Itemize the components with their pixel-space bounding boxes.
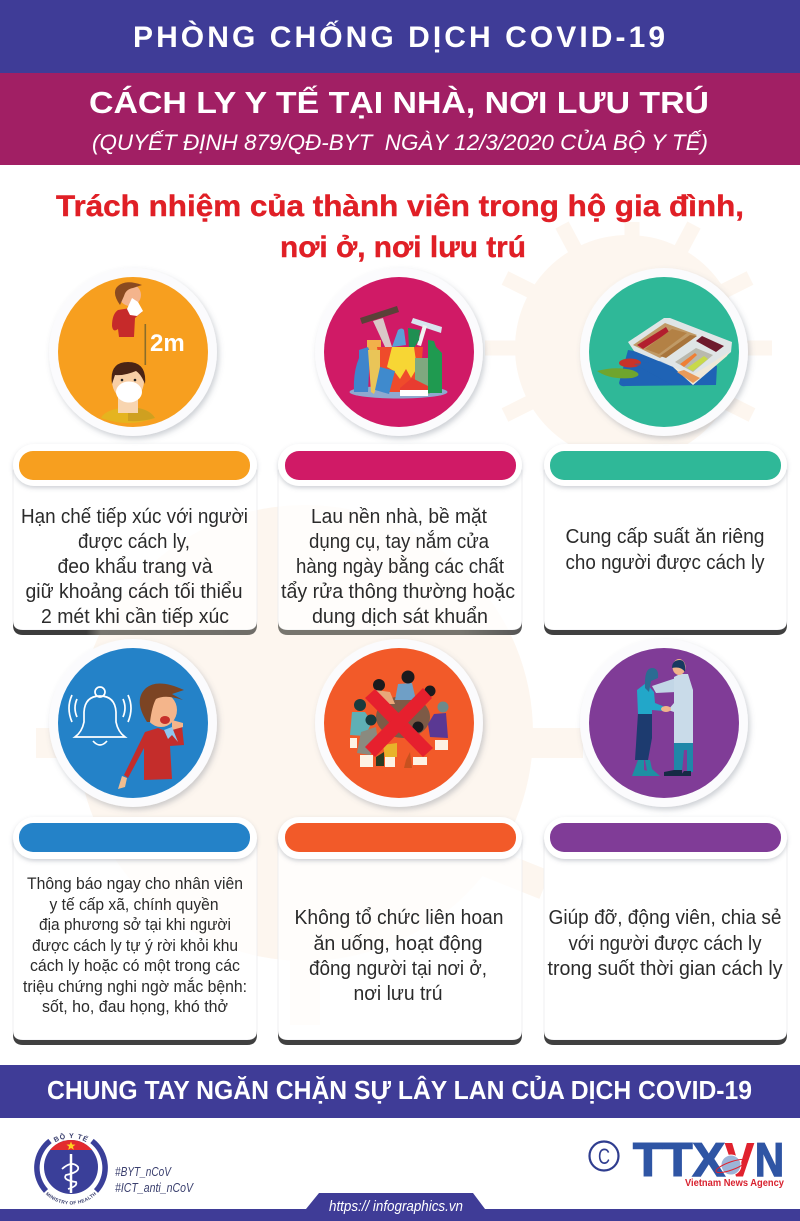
panel: support and encourage bbox=[544, 639, 787, 1045]
text block: được cách ly, bbox=[78, 531, 190, 553]
heading: Trách nhiệm của thành viên trong hộ gia đình, bbox=[56, 190, 744, 223]
text block bbox=[281, 506, 515, 628]
URL: https:// infographics.vn bbox=[329, 1198, 463, 1215]
text block: được cách ly tự ý rời khỏi khu bbox=[32, 937, 238, 955]
logo: copyright mark: C bbox=[598, 1144, 610, 1169]
text block: cho người được cách ly bbox=[566, 552, 764, 574]
icon: lunch box bbox=[580, 268, 748, 436]
text block: Giúp đỡ, động viên, chia sẻ bbox=[548, 907, 782, 929]
card body bbox=[278, 470, 522, 635]
icon: cleaning supplies bbox=[315, 268, 483, 436]
background: virus watermarks bbox=[36, 222, 772, 1025]
colored pill bbox=[13, 817, 257, 859]
hashtags bbox=[115, 1165, 194, 1195]
logo: TTXVN: N bbox=[755, 1133, 784, 1186]
text block: hàng ngày bằng các chất bbox=[296, 555, 504, 578]
text block: dụng cụ, tay nắm cửa bbox=[309, 530, 490, 553]
colored pill bbox=[544, 444, 787, 486]
text block bbox=[548, 907, 782, 980]
text block: y tế cấp xã, chính quyền bbox=[50, 896, 218, 914]
icon: 2m distance bbox=[49, 268, 217, 436]
text block: cách ly hoặc có một trong các bbox=[30, 957, 240, 975]
text block bbox=[294, 907, 504, 1005]
text block: Lau nền nhà, bề mặt bbox=[311, 506, 487, 528]
card body bbox=[13, 470, 257, 635]
text block: Hạn chế tiếp xúc với người bbox=[21, 506, 248, 528]
text block: Cung cấp suất ăn riêng bbox=[566, 526, 764, 548]
logo: TTXVN: Vietnam News Agency bbox=[685, 1178, 784, 1189]
text block: đông người tại nơi ở, bbox=[309, 958, 487, 980]
decision reference: (QUYẾT ĐỊNH 879/QĐ-BYT NGÀY 12/3/2020 CỦA BỘ Y TẾ) bbox=[92, 129, 708, 155]
logo: Ministry of Health emblem bbox=[34, 1132, 108, 1204]
text block: ăn uống, hoạt động bbox=[314, 933, 482, 955]
icon: bell and coughing person bbox=[49, 639, 217, 807]
colored pill bbox=[13, 444, 257, 486]
heading bbox=[56, 190, 744, 264]
colored pill bbox=[544, 817, 787, 859]
text block: với người được cách ly bbox=[568, 933, 762, 955]
text block bbox=[21, 506, 248, 628]
card body bbox=[13, 840, 257, 1045]
logo: Ministry of Health emblem: BỘ Y TẾ bbox=[54, 1132, 89, 1142]
logo: TTXVN bbox=[633, 1133, 784, 1189]
panel: limit contact bbox=[13, 268, 257, 635]
panel: notify health staff bbox=[13, 639, 257, 1045]
card body bbox=[278, 840, 522, 1045]
text block: tẩy rửa thông thường hoặc bbox=[281, 581, 515, 603]
hashtags: #ICT_anti_nCoV bbox=[115, 1181, 194, 1195]
header band bbox=[0, 0, 800, 73]
text block: nơi lưu trú bbox=[354, 983, 442, 1005]
text block: đeo khẩu trang và bbox=[58, 556, 213, 578]
card body bbox=[544, 470, 787, 635]
hashtags: #BYT_nCoV bbox=[115, 1165, 172, 1179]
logo: TTXVN: TTX bbox=[633, 1133, 725, 1186]
footer band with URL tab bbox=[0, 1193, 800, 1221]
heading: nơi ở, nơi lưu trú bbox=[280, 231, 526, 264]
panel: separate meals bbox=[544, 268, 787, 635]
slogan band bbox=[0, 1065, 800, 1118]
text block: giữ khoảng cách tối thiểu bbox=[26, 581, 242, 603]
text block bbox=[566, 526, 764, 574]
text block: triệu chứng nghi ngờ mắc bệnh: bbox=[23, 977, 247, 996]
text block: dung dịch sát khuẩn bbox=[312, 606, 488, 628]
colored pill bbox=[278, 817, 522, 859]
subtitle band bbox=[0, 73, 800, 165]
card body bbox=[544, 840, 787, 1045]
text block bbox=[23, 875, 247, 1016]
text block: địa phương sở tại khi người bbox=[39, 916, 231, 934]
icon: crossed-out gathering bbox=[315, 639, 483, 807]
title: PHÒNG CHỐNG DỊCH COVID-19 bbox=[133, 20, 665, 54]
logo: copyright mark bbox=[590, 1142, 618, 1170]
text block: sốt, ho, đau họng, khó thở bbox=[42, 998, 228, 1016]
subtitle: CÁCH LY Y TẾ TẠI NHÀ, NƠI LƯU TRÚ bbox=[89, 84, 709, 120]
colored pill bbox=[278, 444, 522, 486]
slogan: CHUNG TAY NGĂN CHẶN SỰ LÂY LAN CỦA DỊCH COVID-19 bbox=[47, 1074, 752, 1105]
logo: Ministry of Health emblem: MINISTRY OF HEALTH bbox=[46, 1192, 96, 1204]
icon: doctor comforting patient bbox=[580, 639, 748, 807]
panel: clean surfaces bbox=[278, 268, 522, 635]
panel: no gatherings bbox=[278, 639, 522, 1045]
text block: Thông báo ngay cho nhân viên bbox=[27, 875, 243, 893]
text block: trong suốt thời gian cách ly bbox=[548, 958, 782, 980]
logo: TTXVN: V bbox=[725, 1133, 755, 1186]
icon: 2m distance: 2m bbox=[150, 330, 185, 357]
text block: Không tổ chức liên hoan bbox=[294, 907, 504, 929]
text block: 2 mét khi cần tiếp xúc bbox=[41, 606, 229, 628]
